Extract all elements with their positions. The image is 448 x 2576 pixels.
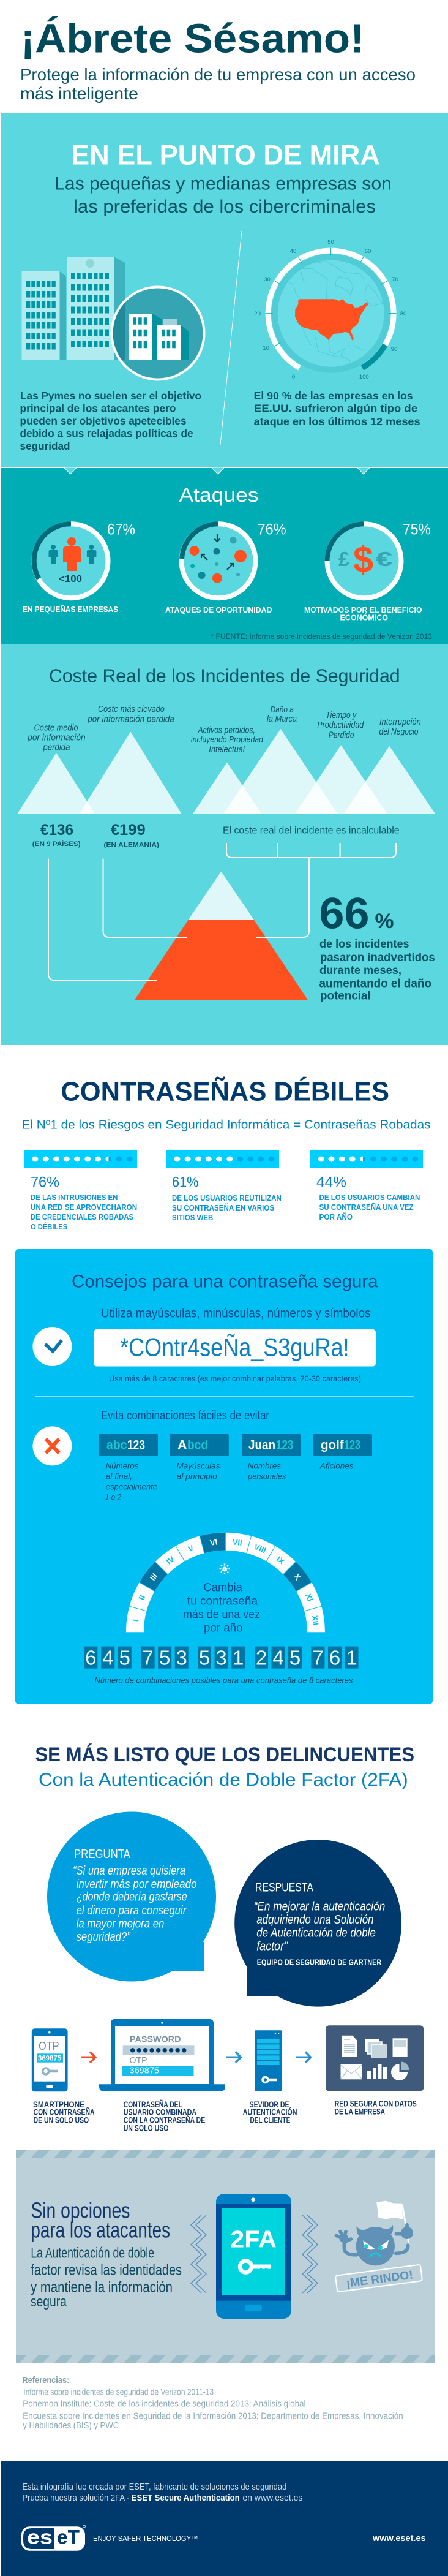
captions: flow steps: USUARIO COMBINADA <box>124 2107 196 2117</box>
stat: 66%: durante meses, <box>319 964 401 977</box>
tip: avoid easy combinations: Evita combinaciones fáciles de evitar <box>101 1409 269 1422</box>
icon: 2FA phone: 2FA <box>230 2226 277 2253</box>
chart: calendar arc: V <box>187 1543 195 1554</box>
connector lines <box>48 843 396 980</box>
tip: avoid easy combinations: 123 <box>127 1438 145 1452</box>
text: 90% of companies: EE.UU. sufrieron algún tipo de <box>254 402 417 415</box>
chart: calendar arc: I <box>131 1618 140 1622</box>
footer text: ESET Secure Authentication <box>132 2493 240 2503</box>
mountain labels: Daño a <box>271 705 294 715</box>
logo: eset <box>21 2525 86 2551</box>
cost figures: €199 <box>111 822 146 839</box>
heading: sin opciones: Sin opciones <box>31 2198 130 2223</box>
header: title and subtitle <box>20 16 416 103</box>
tip: strong password: Utiliza mayúsculas, minúsculas, números y símbolos <box>101 1306 371 1321</box>
tip: avoid easy combinations: A <box>177 1438 187 1452</box>
heading: ataques: Ataques <box>179 484 258 506</box>
gauge scale labels: 80 <box>400 311 406 317</box>
number counter: 5 <box>159 1647 170 1669</box>
tip: strong password: *COntr4seÑa_S3guRa! <box>120 1333 349 1361</box>
chart: calendar arc <box>129 1532 322 1634</box>
captions: flow steps <box>33 2099 417 2133</box>
stat: 76%: DE CREDENCIALES ROBADAS <box>31 1212 133 1222</box>
chart: calendar arc: III <box>148 1571 159 1582</box>
speech bubble: pregunta: seguridad?” <box>77 1930 131 1944</box>
stat: 44%: 44% <box>316 1174 346 1190</box>
icon: people <box>49 537 96 584</box>
icon: smartphone: OTP <box>39 2040 59 2052</box>
subheading: El Nº1 de los Riesgos en Seguridad Informática = Contraseñas Robadas <box>22 1119 431 1132</box>
tip: avoid easy combinations: personales <box>247 1471 286 1481</box>
icon: asterisk <box>219 1563 230 1574</box>
text: 90% of companies: ataque en los últimos 12 meses <box>254 415 420 428</box>
icon: laptop: OTP <box>130 2055 147 2066</box>
tip: avoid easy combinations: Juan <box>248 1438 275 1452</box>
mountain labels: Productividad <box>317 720 364 730</box>
tip: strong password <box>32 1306 376 1383</box>
number counter: 7 <box>142 1647 154 1669</box>
chart: ring 76% opportunistic attacks <box>165 521 286 614</box>
references <box>22 2375 403 2431</box>
chart: calendar arc: XII <box>310 1615 321 1626</box>
number counter: Número de combinaciones posibles para una contraseña de 8 caracteres <box>94 1675 353 1685</box>
chart: calendar arc: VII <box>232 1537 243 1547</box>
speech bubble: respuesta <box>234 1840 401 2007</box>
tip: avoid easy combinations: abc <box>106 1438 127 1452</box>
icon: defeated devil with white flag <box>335 2201 422 2292</box>
captions: flow steps: AUTENTICACIÓN <box>243 2107 297 2117</box>
icon: laptop: PASSWORD <box>130 2034 181 2044</box>
tip: avoid easy combinations: 123 <box>344 1438 360 1452</box>
captions: flow steps: SEVIDOR DE <box>250 2099 289 2109</box>
speech bubble: respuesta: adquiriendo una Solución <box>256 1913 374 1927</box>
icon: currencies: $ <box>353 539 373 580</box>
captions: flow steps: CON CONTRASEÑA <box>34 2107 95 2117</box>
number counter: 3 <box>176 1647 187 1669</box>
stat: 66% <box>319 890 435 1002</box>
stamp: me rindo <box>335 2265 422 2292</box>
speech bubble: pregunta <box>47 1812 216 1981</box>
mountain labels: incluyendo Propiedad <box>191 735 264 745</box>
chart: calendar arc: Cambia <box>203 1581 242 1594</box>
panel: consejos para una contraseña segura <box>15 1249 433 1704</box>
cost figures <box>32 822 400 848</box>
text: pymes: principal de los atacantes pero <box>20 402 176 415</box>
icon: currencies <box>338 539 392 580</box>
cost figures: (EN 9 PAÍSES) <box>32 840 81 848</box>
number counter: 6 <box>85 1647 96 1669</box>
icon: server <box>255 2030 282 2091</box>
mountain labels: Activos perdidos, <box>198 725 255 735</box>
speech bubble: respuesta: RESPUESTA <box>255 1881 314 1894</box>
gauge scale labels: 40 <box>290 248 296 255</box>
chart: calendar arc: VI <box>209 1537 218 1547</box>
tip: avoid easy combinations: Aficiones <box>319 1461 354 1471</box>
footer text: en www.eset.es <box>242 2493 302 2503</box>
number counter: 5 <box>199 1647 210 1669</box>
heading: se más listo: SE MÁS LISTO QUE LOS DELINCUENTES <box>35 1743 414 1766</box>
icon: people: <100 <box>59 574 82 584</box>
stat: 66%: pasaron inadvertidos <box>320 951 435 964</box>
tip: avoid easy combinations: bcd <box>187 1438 208 1452</box>
panel: sin opciones para los atacantes <box>16 2150 435 2363</box>
stat: 76%: UNA RED SE APROVECHARON <box>31 1203 137 1212</box>
chart: ring 76% opportunistic attacks: ATAQUES DE OPORTUNIDAD <box>165 605 272 614</box>
icon: laptop: 369875 <box>130 2066 159 2076</box>
tip: avoid easy combinations: 1 o 2 <box>105 1492 121 1502</box>
captions: flow steps: DE LA EMPRESA <box>335 2107 385 2117</box>
icon: office buildings with magnifier circle <box>22 257 208 384</box>
captions: flow steps: SMARTPHONE <box>33 2099 84 2109</box>
footer text <box>22 2482 302 2503</box>
chart: calendar arc: IV <box>165 1554 176 1566</box>
mountain labels: del Negocio <box>379 727 419 737</box>
stat: 61% <box>166 1150 282 1222</box>
cost figures: €136 <box>40 822 73 839</box>
text: 2FA description: segura <box>31 2294 67 2310</box>
speech bubble: respuesta: EQUIPO DE SEGURIDAD DE GARTNER <box>257 1957 382 1966</box>
tip: avoid easy combinations: al principio <box>176 1471 217 1481</box>
speech bubble: pregunta: invertir más por empleado <box>77 1878 197 1891</box>
panel: en el punto de mira <box>1 113 448 469</box>
mountain labels: Perdido <box>329 730 354 740</box>
gauge scale labels: 60 <box>365 248 371 255</box>
captions: flow steps: CON LA CONTRASEÑA DE <box>124 2115 205 2125</box>
title: ¡Ábrete Sésamo! <box>21 16 365 62</box>
section: contraseñas débiles <box>22 1076 431 1231</box>
captions: flow steps: RED SEGURA CON DATOS <box>335 2099 417 2109</box>
speech bubble: pregunta: PREGUNTA <box>74 1848 131 1861</box>
chart: calendar arc: VIII <box>253 1542 267 1555</box>
icon: smartphone <box>32 2028 68 2091</box>
stat: 66%: 66 <box>319 890 370 938</box>
subheading: las preferidas de los cibercriminales <box>73 197 376 217</box>
chart: calendar arc: tu contraseña <box>187 1595 258 1608</box>
stat: 66%: % <box>375 910 394 933</box>
big mountain <box>135 872 308 1000</box>
cost figures: (EN ALEMANIA) <box>104 841 159 848</box>
arrow: red <box>81 2052 95 2063</box>
gauge scale labels: 70 <box>392 276 398 283</box>
chart: ring 67% small companies: EN PEQUEÑAS EMPRESAS <box>23 605 118 614</box>
text: 2FA description: y mantiene la información <box>31 2279 173 2296</box>
stat: 61%: SU CONTRASEÑA EN VARIOS <box>172 1203 274 1212</box>
subtitle: Protege la información de tu empresa con un acceso <box>20 65 416 84</box>
gauge: 90% of US companies <box>254 239 406 380</box>
stat: 66%: de los incidentes <box>319 938 409 951</box>
text: 2FA description: La Autenticación de doble <box>31 2245 154 2262</box>
captions: flow steps: CONTRASEÑA DEL <box>124 2099 182 2109</box>
mountain labels: Tiempo y <box>326 711 357 720</box>
mountain labels: Intelectual <box>209 745 245 755</box>
stat: 76%: DE LAS INTRUSIONES EN <box>31 1193 118 1202</box>
speech bubble: pregunta: “Si una empresa quisiera <box>73 1864 185 1878</box>
tip: avoid easy combinations: Mayúsculas <box>176 1461 220 1471</box>
footer text: Prueba nuestra solución 2FA - <box>22 2493 129 2503</box>
stat: 61%: SITIOS WEB <box>172 1213 213 1222</box>
website: www.eset.es <box>372 2533 426 2544</box>
panel: company data icons <box>326 2025 424 2091</box>
number counter: 2 <box>256 1647 267 1669</box>
references: Informe sobre incidentes de seguridad de Verizon 2011-13 <box>23 2387 214 2397</box>
heading: coste real: Coste Real de los Incidentes de Seguridad <box>49 665 400 687</box>
mountain labels: Coste medio <box>34 723 78 733</box>
stat: 44% <box>310 1150 423 1222</box>
stat: 44%: DE LOS USUARIOS CAMBIAN <box>319 1193 420 1202</box>
gauge scale labels: 20 <box>254 311 261 317</box>
number counter: 1 <box>346 1647 357 1669</box>
icon: currencies: £ <box>338 548 350 570</box>
heading: en el punto de mira: EN EL PUNTO DE MIRA <box>71 140 380 171</box>
chart: calendar arc: IX <box>275 1554 286 1566</box>
tagline: ENJOY SAFER TECHNOLOGY™ <box>93 2534 198 2543</box>
mountain labels: la Marca <box>267 714 297 724</box>
number counter: 5 <box>289 1647 301 1669</box>
stat: 66%: aumentando el daño <box>319 977 431 990</box>
stat: 61%: DE LOS USUARIOS REUTILIZAN <box>172 1193 282 1203</box>
footer text: Esta infografía fue creada por ESET, fabricante de soluciones de seguridad <box>22 2482 286 2492</box>
mountain labels: perdida <box>43 742 70 752</box>
number counter: 4 <box>102 1647 113 1669</box>
text: 2FA description <box>31 2245 182 2310</box>
subheading <box>54 174 392 217</box>
chart: ring 67% small companies <box>23 521 135 614</box>
icon: laptop <box>99 2019 225 2091</box>
icon: smartphone: 369875 <box>38 2053 61 2062</box>
speech bubble: pregunta: ¿donde debería gastarse <box>77 1890 187 1904</box>
subtitle <box>20 65 416 103</box>
mountain labels: por información perdida <box>87 714 174 724</box>
number counter: 5 <box>119 1647 130 1669</box>
gauge scale labels: 100 <box>359 374 369 380</box>
tip: strong password: Usa más de 8 caracteres (es mejor combinar palabras, 20-30 caracteres) <box>109 1374 361 1383</box>
stat: 76%: 76% <box>31 1174 59 1190</box>
speech bubble: respuesta: factor” <box>256 1940 288 1953</box>
text: pymes: seguridad <box>20 440 70 452</box>
speech bubble: respuesta: “En mejorar la autenticación <box>254 1900 385 1913</box>
chart: ring 75% financial motive <box>304 521 431 622</box>
heading: sin opciones: para los atacantes <box>31 2218 170 2243</box>
captions: flow steps: UN SOLO USO <box>124 2123 169 2133</box>
stat: 44%: SU CONTRASEÑA UNA VEZ <box>319 1203 414 1212</box>
gauge scale labels: 90 <box>391 346 397 353</box>
mountain labels: por información <box>27 733 86 742</box>
chart: calendar arc: por año <box>204 1622 242 1634</box>
heading: consejos: Consejos para una contraseña segura <box>72 1272 378 1292</box>
source note: * FUENTE: Informe sobre incidentes de seguridad de Venizon 2013 <box>211 632 432 641</box>
arrow: blue 2 <box>296 2052 311 2063</box>
speech bubble: respuesta: de Autenticación de doble <box>256 1927 376 1940</box>
number counter: 1 <box>233 1647 244 1669</box>
gauge scale labels: 10 <box>263 345 269 352</box>
icon: check <box>32 1327 72 1366</box>
gauge scale labels: 0 <box>292 374 295 380</box>
number counter: 6 <box>329 1647 340 1669</box>
tip: avoid easy combinations: especialmente <box>106 1482 157 1492</box>
subheading: 2FA: Con la Autenticación de Doble Factor (2FA) <box>39 1770 408 1790</box>
heading: sin opciones <box>31 2198 170 2243</box>
map: united states <box>295 299 368 341</box>
text: 90% of companies <box>254 390 420 428</box>
logo: eset: eT <box>57 2526 80 2548</box>
captions: flow steps: DE UN SOLO USO <box>34 2115 89 2125</box>
chart: ring 67% small companies: 67% <box>107 521 135 538</box>
tip: avoid easy combinations: al final, <box>106 1471 132 1481</box>
chart: calendar arc: XI <box>304 1592 315 1603</box>
chart: ring 75% financial motive: ECONÓMICO <box>340 613 388 622</box>
speech bubble: pregunta: el dinero para conseguir <box>77 1904 187 1917</box>
number counter: 7 <box>312 1647 324 1669</box>
chart: ring 75% financial motive: MOTIVADOS POR EL BENEFICIO <box>304 605 422 614</box>
tip: avoid easy combinations <box>32 1409 372 1502</box>
stat: 44%: POR AÑO <box>319 1212 353 1222</box>
text: pymes: debido a sus relajadas políticas de <box>20 427 193 439</box>
icon: cross <box>32 1426 72 1465</box>
panel: ataques <box>1 463 448 644</box>
stat: 76%: O DÉBILES <box>31 1222 67 1231</box>
mountain labels: Coste más elevado <box>98 704 165 714</box>
footer <box>1 2461 448 2576</box>
chart: ring 76% opportunistic attacks: 76% <box>258 521 286 538</box>
text: 90% of companies: El 90 % de las empresas en los <box>254 390 413 402</box>
mountains <box>17 729 436 814</box>
number counter <box>84 1647 359 1685</box>
references: Ponemon Institute: Coste de los incidentes de seguridad 2013: Análisis global <box>23 2399 306 2409</box>
tip: avoid easy combinations: 123 <box>276 1438 294 1452</box>
stat: 66%: potencial <box>320 990 371 1002</box>
cost figures: El coste real del incidente es incalculable <box>223 826 400 836</box>
chart: calendar arc: X <box>292 1572 303 1582</box>
stat: 61%: 61% <box>172 1174 198 1190</box>
gauge scale labels <box>254 239 406 380</box>
mountain labels: Interrupción <box>379 717 421 727</box>
stat: 76% <box>24 1150 137 1231</box>
text: pymes <box>20 390 201 452</box>
chart: calendar arc: II <box>136 1593 147 1601</box>
logo: eset: es <box>27 2526 53 2548</box>
mountain labels <box>27 704 421 755</box>
tip: avoid easy combinations: Nombres <box>248 1461 281 1471</box>
arrow: blue 1 <box>226 2052 241 2063</box>
subtitle: más inteligente <box>20 84 138 103</box>
tip: avoid easy combinations: Números <box>106 1461 138 1471</box>
panel: coste real <box>1 644 448 1045</box>
icon: 2FA phone <box>216 2194 291 2319</box>
gauge scale labels: 50 <box>327 239 334 246</box>
number counter: 3 <box>215 1647 227 1669</box>
icon: currencies: € <box>376 548 392 570</box>
gauge scale labels: 30 <box>264 276 271 283</box>
chart: calendar arc: más de una vez <box>183 1609 260 1622</box>
references: y Habilidades (BIS) y PWC <box>23 2420 119 2431</box>
heading: contraseñas débiles: CONTRASEÑAS DÉBILES <box>61 1076 389 1107</box>
section: doble factor <box>32 1743 424 2133</box>
text: pymes: Las Pymes no suelen ser el objetivo <box>20 390 201 402</box>
speech bubble: pregunta: la mayor mejora en <box>77 1917 164 1931</box>
text: pymes: pueden ser objetivos apetecibles <box>20 415 187 427</box>
icon: shield zigzags <box>191 2215 318 2293</box>
icon: target dots and arrows <box>190 534 247 583</box>
references: Referencias: <box>22 2375 69 2385</box>
references: Encuesta sobre Incidentes en Seguridad de la Información 2013: Departmento de Empresas, Innovación <box>23 2411 403 2422</box>
captions: flow steps: DEL CLIENTE <box>250 2115 290 2125</box>
tip: avoid easy combinations: golf <box>321 1438 345 1452</box>
chart: ring 75% financial motive: 75% <box>403 521 431 538</box>
stamp: me rindo: ¡ME RINDO! <box>345 2268 414 2291</box>
subheading: Las pequeñas y medianas empresas son <box>54 174 392 194</box>
number counter: 4 <box>272 1647 284 1669</box>
text: 2FA description: factor revisa las identidades <box>31 2262 182 2278</box>
